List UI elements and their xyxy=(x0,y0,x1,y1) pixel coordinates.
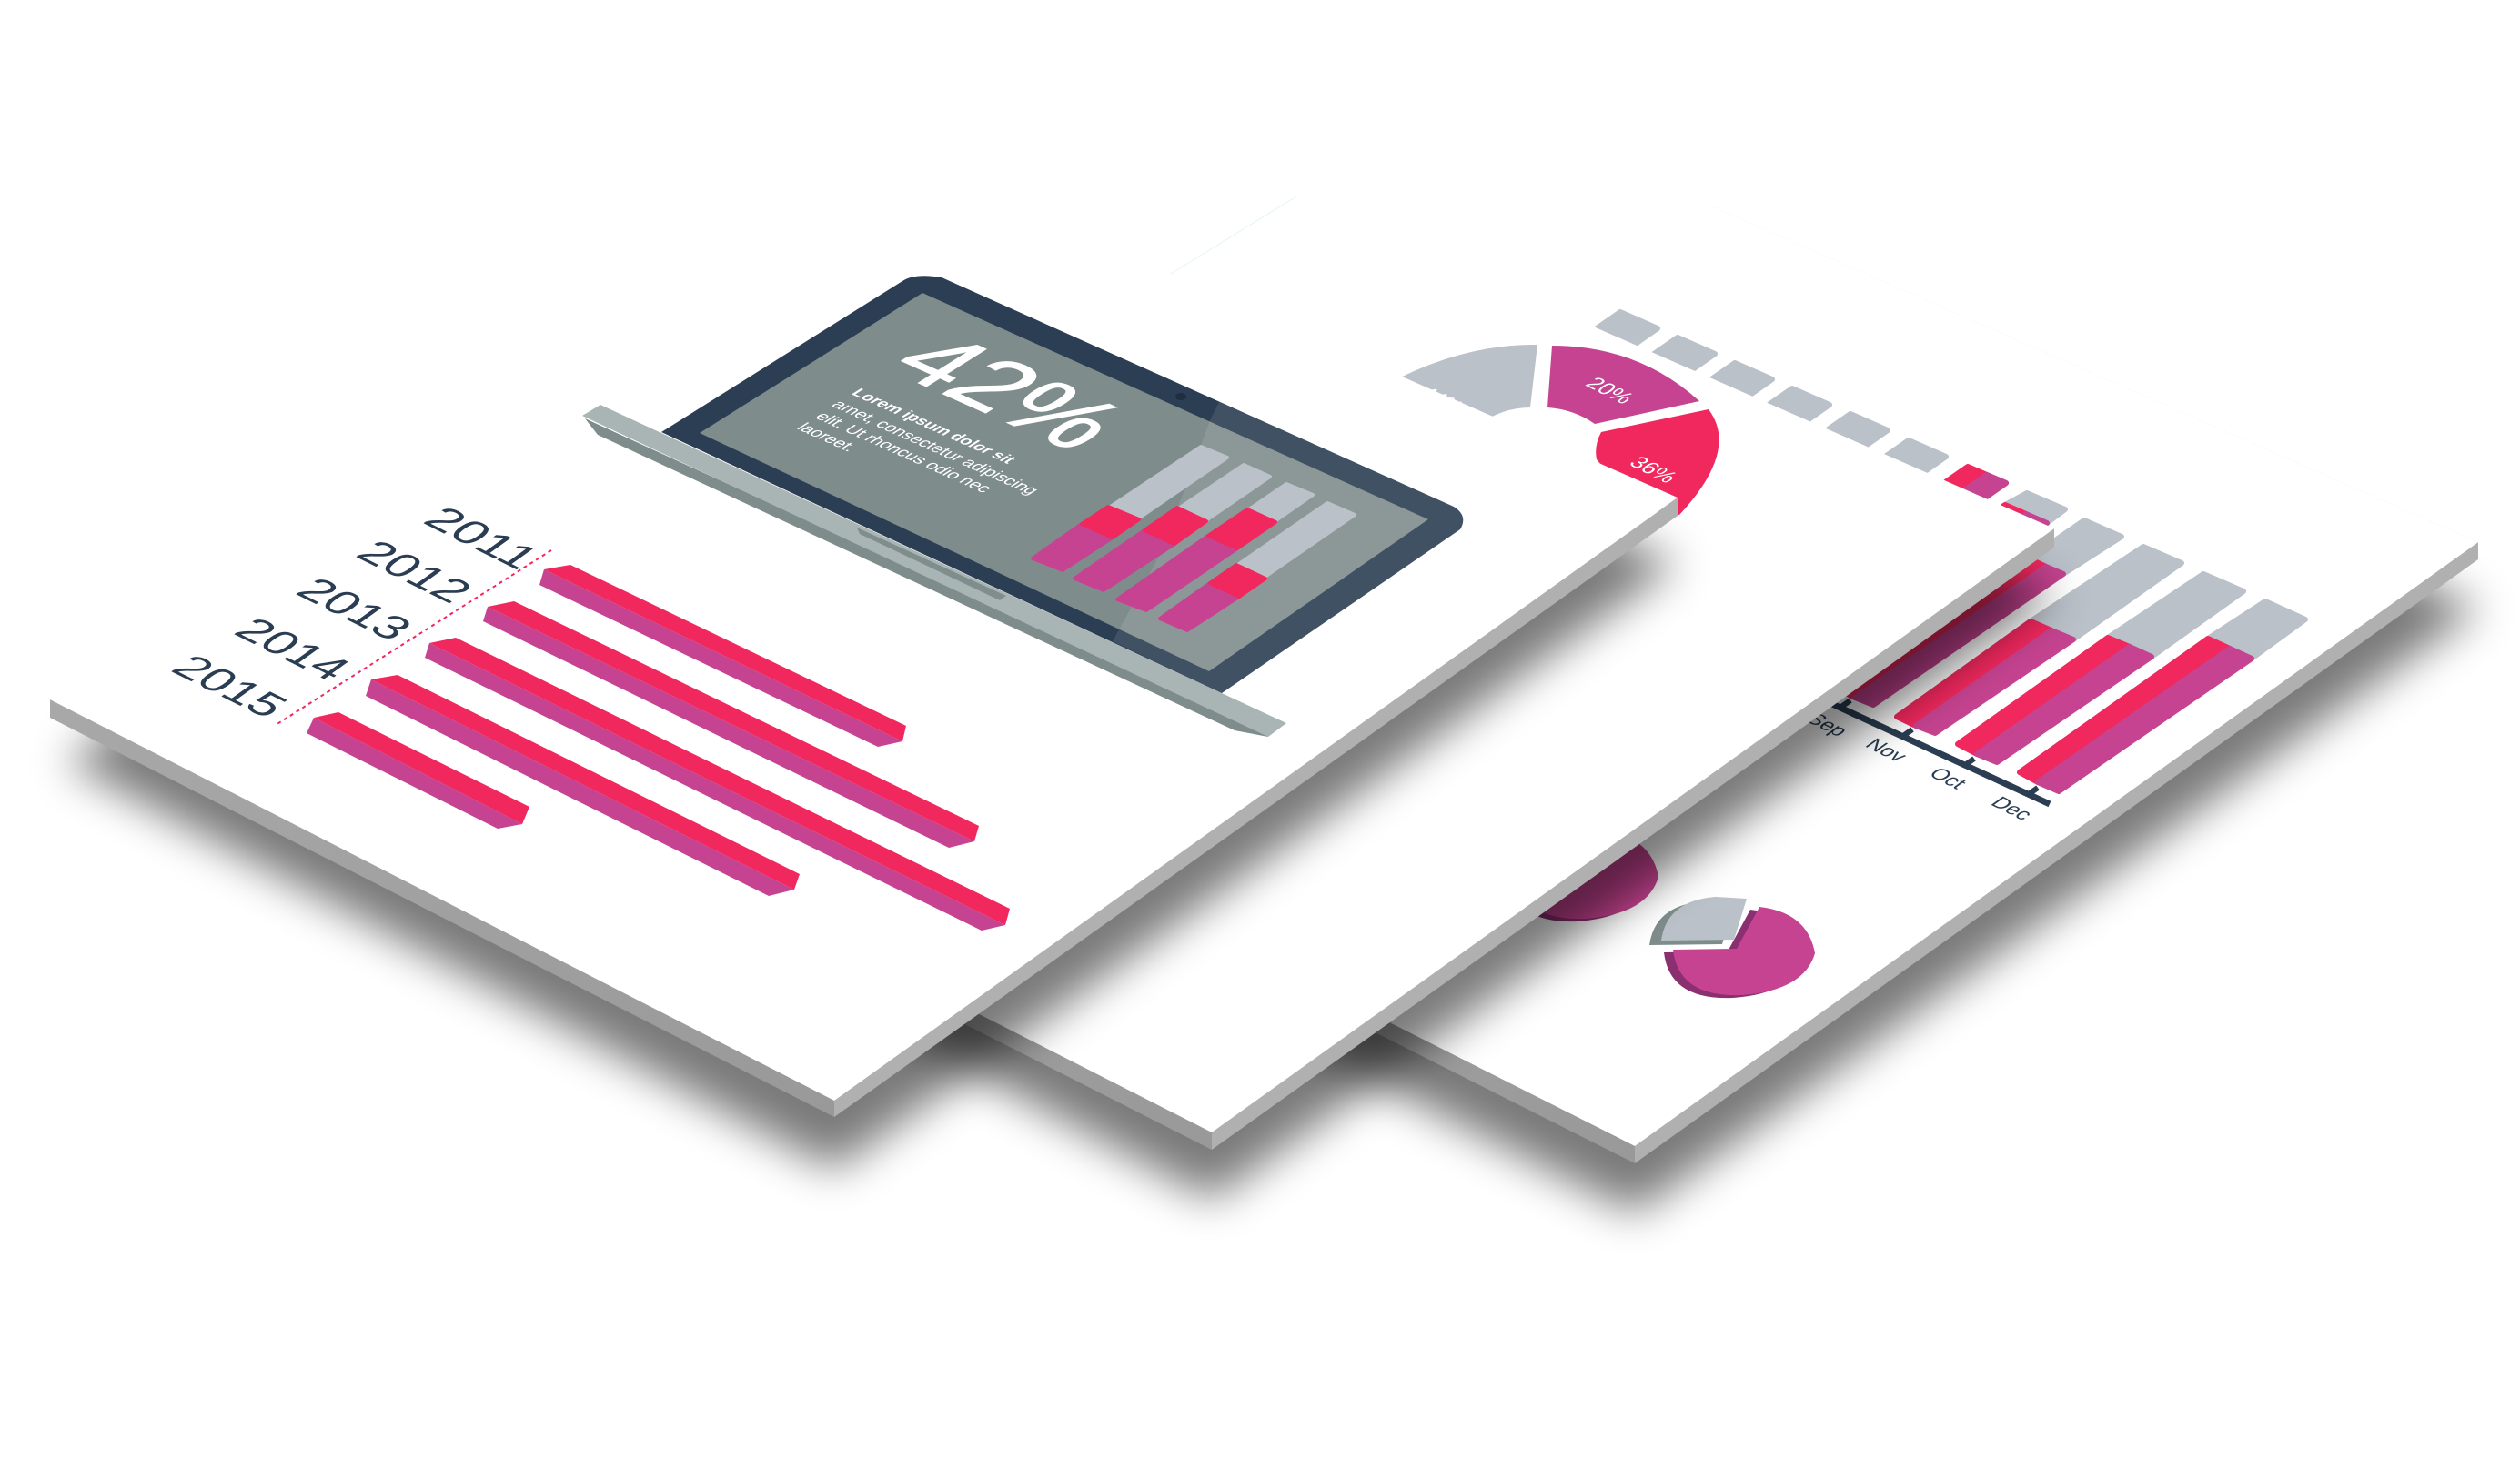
axis labels: Sep xyxy=(1801,709,1854,740)
screen body text: amet, consectetur adipiscing xyxy=(827,397,1043,498)
year labels: 2013 xyxy=(287,570,423,647)
donut chart xyxy=(1383,345,1719,515)
screen body text: elit. Ut rhoncus odio nec xyxy=(811,409,996,496)
laptop hinge xyxy=(857,528,1006,600)
bar July xyxy=(1721,467,2006,654)
axis labels: Dec xyxy=(1986,793,2039,823)
pie chart with gray slice xyxy=(1649,897,1815,998)
year labels: 2011 xyxy=(414,499,550,576)
laptop base lip xyxy=(585,418,1270,737)
bar August xyxy=(1780,493,2065,682)
faint back sheet edge xyxy=(1710,206,2478,542)
bar 2013 xyxy=(425,638,1010,931)
screen gloss xyxy=(1113,402,1463,693)
donut segment red xyxy=(1596,409,1719,515)
front sheet right edge xyxy=(834,498,1678,1117)
front sheet surface xyxy=(50,131,1678,1101)
bar September xyxy=(1837,520,2122,705)
screen bar 3 xyxy=(1117,484,1313,610)
screen body text: laoreet. xyxy=(792,420,861,455)
middle sheet shadow xyxy=(473,273,2055,1200)
bar 2014 xyxy=(366,675,800,896)
screen bar 2 xyxy=(1074,465,1270,590)
donut label gray: 44% xyxy=(1415,384,1469,415)
axis labels: Nov xyxy=(1860,735,1913,765)
laptop camera xyxy=(1175,393,1186,400)
monthly bar chart xyxy=(1374,312,2305,791)
screen bar 1 xyxy=(1033,447,1227,570)
bar November xyxy=(1897,547,2182,733)
faint sheet corner line xyxy=(1171,196,1296,274)
dashed axis line xyxy=(276,550,551,725)
year labels: 2012 xyxy=(347,533,483,609)
laptop base top xyxy=(582,405,1286,737)
donut label 20 percent: 20% xyxy=(1580,374,1639,407)
front sheet shadow xyxy=(66,218,1678,1170)
year labels: 2015 xyxy=(162,648,298,724)
bar October xyxy=(1958,574,2243,762)
sheet: back report page xyxy=(873,206,2480,1213)
donut label 36 percent: 36% xyxy=(1624,453,1683,487)
bar December xyxy=(2020,601,2305,791)
middle sheet left edge xyxy=(455,748,1212,1150)
bar 2011 xyxy=(539,565,906,747)
bars January to June xyxy=(1374,312,1946,628)
laptop xyxy=(582,276,1463,737)
back sheet right edge xyxy=(1635,542,2478,1163)
sheet: front report page xyxy=(50,131,1678,1170)
screen body text: Lorem ipsum dolor sit xyxy=(848,386,1020,466)
axis labels xyxy=(1801,709,2039,823)
front sheet left edge xyxy=(50,699,834,1117)
pie chart, partly covered xyxy=(1508,830,1658,921)
year labels xyxy=(162,499,550,724)
horizontal 3D bar chart xyxy=(307,565,1010,931)
bar 2012 xyxy=(483,601,979,848)
laptop display xyxy=(700,293,1428,671)
year labels: 2014 xyxy=(225,610,361,687)
back sheet shadow xyxy=(873,282,2480,1213)
donut segment gray xyxy=(1383,345,1537,455)
donut segment magenta xyxy=(1547,346,1699,424)
middle sheet right edge xyxy=(1212,528,2054,1150)
screen bar chart xyxy=(1033,447,1355,630)
back sheet left edge xyxy=(873,762,1635,1163)
screen bar 4 xyxy=(1160,503,1355,630)
middle sheet surface xyxy=(455,196,2054,1132)
headline 42 percent: 42% xyxy=(868,319,1152,464)
chart x axis xyxy=(1830,700,2050,804)
back sheet surface xyxy=(873,206,2478,1146)
bar 2015 xyxy=(307,712,529,829)
laptop screen frame xyxy=(661,276,1463,693)
axis labels: Oct xyxy=(1924,764,1973,792)
sheet: middle report page xyxy=(455,196,2055,1200)
